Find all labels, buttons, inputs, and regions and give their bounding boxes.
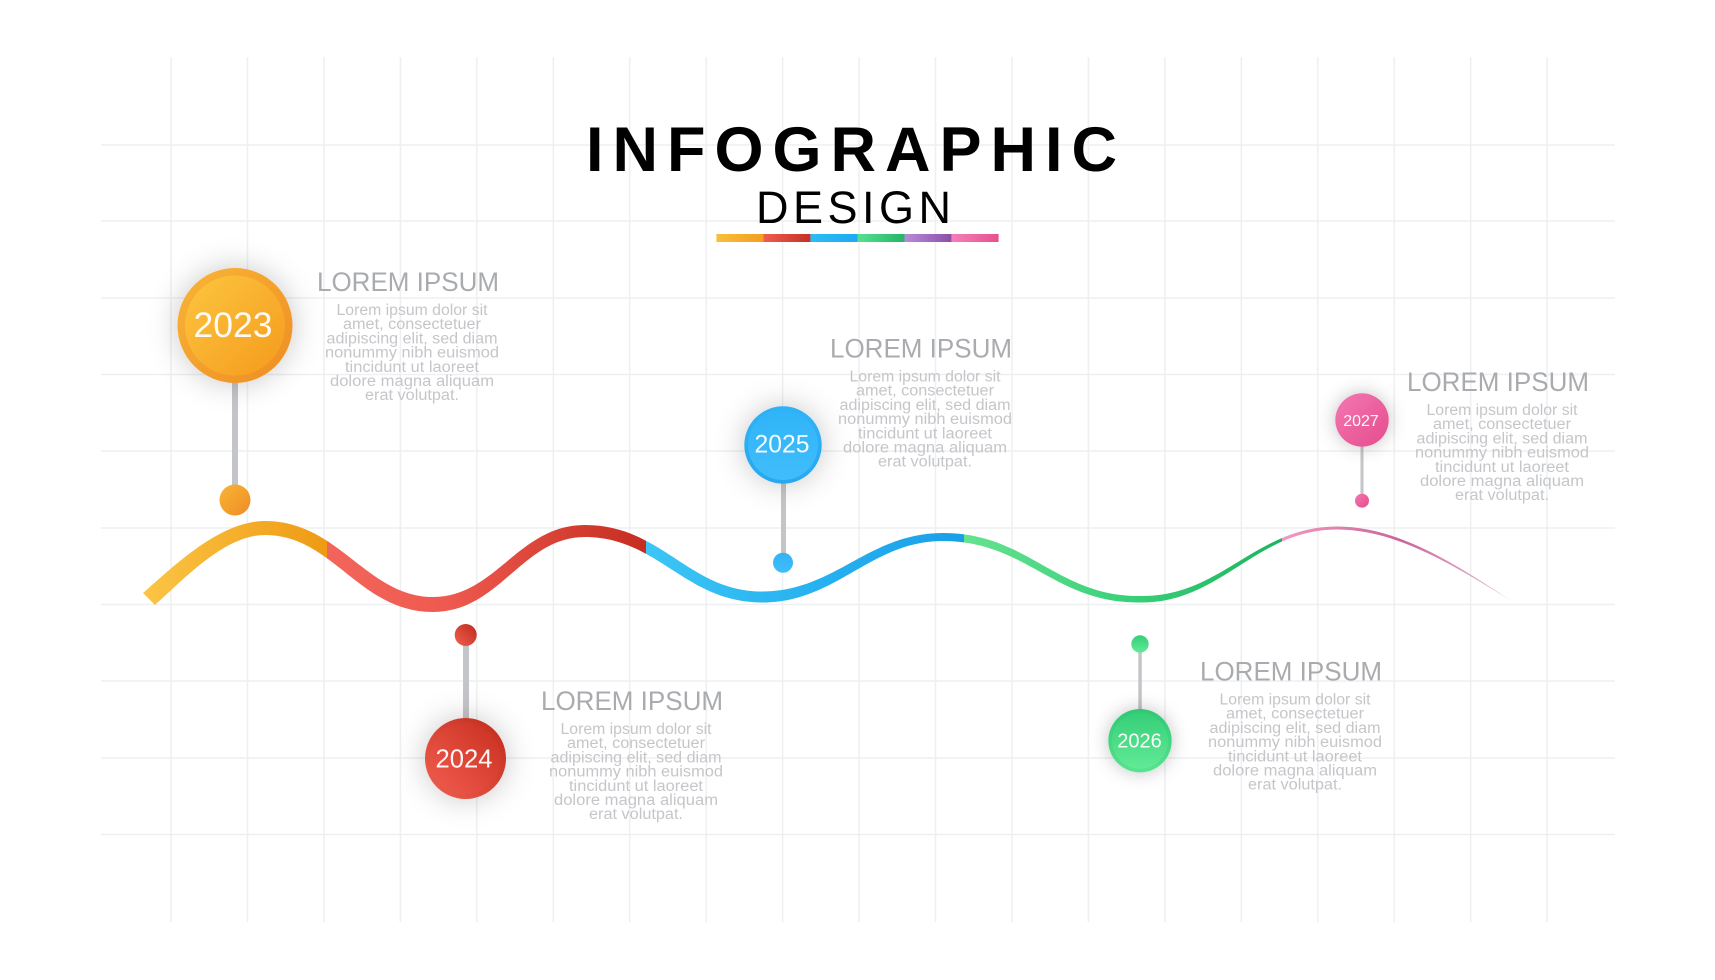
text block 2023: erat volutpat.: [365, 387, 459, 404]
text block 2027: Lorem ipsum dolor sit: [1426, 402, 1578, 419]
milestone 2025: [744, 406, 822, 573]
milestone 2026: [1108, 635, 1172, 772]
wave timeline ribbon: [143, 521, 1510, 612]
badge 2024: [425, 718, 506, 799]
colour bar under title: [716, 234, 999, 242]
text block 2023: [317, 267, 499, 404]
dot 2025: [773, 553, 793, 573]
stem 2026: [1138, 650, 1142, 712]
text block 2026: Lorem ipsum dolor sit: [1220, 692, 1371, 708]
text block 2025: adipiscing elit, sed diam: [840, 397, 1010, 414]
milestone 2023: [178, 268, 292, 516]
text block 2026: tincidunt ut laoreet: [1228, 748, 1363, 765]
text block 2024: Lorem ipsum dolor sit: [560, 721, 712, 738]
text block 2024: nonummy nibh euismod: [549, 764, 723, 781]
text block 2024: tincidunt ut laoreet: [569, 778, 704, 795]
text block 2025: dolore magna aliquam: [843, 440, 1007, 456]
text block 2023: tincidunt ut laoreet: [345, 359, 480, 376]
text block 2026: dolore magna aliquam: [1213, 762, 1377, 780]
dot 2026: [1131, 635, 1149, 653]
text block 2023: Lorem ipsum dolor sit: [336, 302, 488, 319]
text block 2027: adipiscing elit, sed diam: [1416, 430, 1588, 447]
badge 2024: 2024: [436, 746, 492, 774]
badge 2025: 2025: [755, 432, 809, 458]
text block 2026: [1200, 656, 1382, 794]
text block 2027: nonummy nibh euismod: [1415, 445, 1589, 462]
text block 2023: nonummy nibh euismod: [325, 345, 499, 362]
text block 2023: dolore magna aliquam: [330, 373, 494, 390]
text block 2023: LOREM IPSUM: [317, 267, 499, 297]
text block 2025: [830, 334, 1012, 471]
text block 2024: amet, consectetuer: [567, 735, 705, 752]
text block 2025: Lorem ipsum dolor sit: [850, 368, 1001, 386]
badge 2027: 2027: [1343, 413, 1379, 430]
text block 2024: LOREM IPSUM: [541, 686, 723, 716]
stem 2025: [781, 480, 786, 558]
text block 2025: amet, consectetuer: [856, 383, 994, 400]
text block 2026: amet, consectetuer: [1226, 706, 1364, 723]
text block 2025: nonummy nibh euismod: [838, 411, 1012, 428]
stem 2023: [232, 380, 238, 488]
milestone 2024: [425, 624, 506, 799]
text block 2025: tincidunt ut laoreet: [858, 425, 993, 442]
badge 2023: [178, 268, 292, 383]
badge 2025: [744, 406, 822, 484]
subtitle: DESIGN: [756, 182, 951, 233]
dot 2024: [455, 624, 477, 646]
text block 2027: amet, consectetuer: [1433, 416, 1571, 433]
text block 2025: erat volutpat.: [878, 454, 972, 471]
title: INFOGRAPHIC: [586, 115, 1117, 185]
stem 2024: [463, 644, 469, 720]
text block 2027: dolore magna aliquam: [1420, 473, 1584, 490]
stem 2027: [1360, 444, 1364, 496]
milestone 2027: [1335, 393, 1389, 508]
text block 2027: tincidunt ut laoreet: [1435, 459, 1570, 476]
text block 2025: LOREM IPSUM: [830, 334, 1012, 364]
dot 2027: [1355, 494, 1369, 508]
badge 2026: 2026: [1117, 730, 1162, 752]
text block 2026: nonummy nibh euismod: [1208, 734, 1382, 751]
text block 2024: dolore magna aliquam: [554, 792, 718, 809]
text block 2027: erat volutpat.: [1455, 487, 1549, 504]
text block 2023: amet, consectetuer: [343, 316, 481, 333]
text block 2026: LOREM IPSUM: [1200, 656, 1382, 686]
text block 2024: erat volutpat.: [589, 806, 683, 823]
text block 2026: adipiscing elit, sed diam: [1210, 720, 1380, 737]
text block 2024: adipiscing elit, sed diam: [550, 749, 722, 766]
dot 2023: [220, 484, 250, 516]
text block 2027: [1407, 367, 1589, 504]
text block 2023: adipiscing elit, sed diam: [326, 330, 498, 347]
text block 2026: erat volutpat.: [1248, 777, 1342, 794]
text block 2024: [541, 686, 723, 823]
text block 2027: LOREM IPSUM: [1407, 367, 1589, 397]
badge 2023: 2023: [194, 305, 272, 345]
